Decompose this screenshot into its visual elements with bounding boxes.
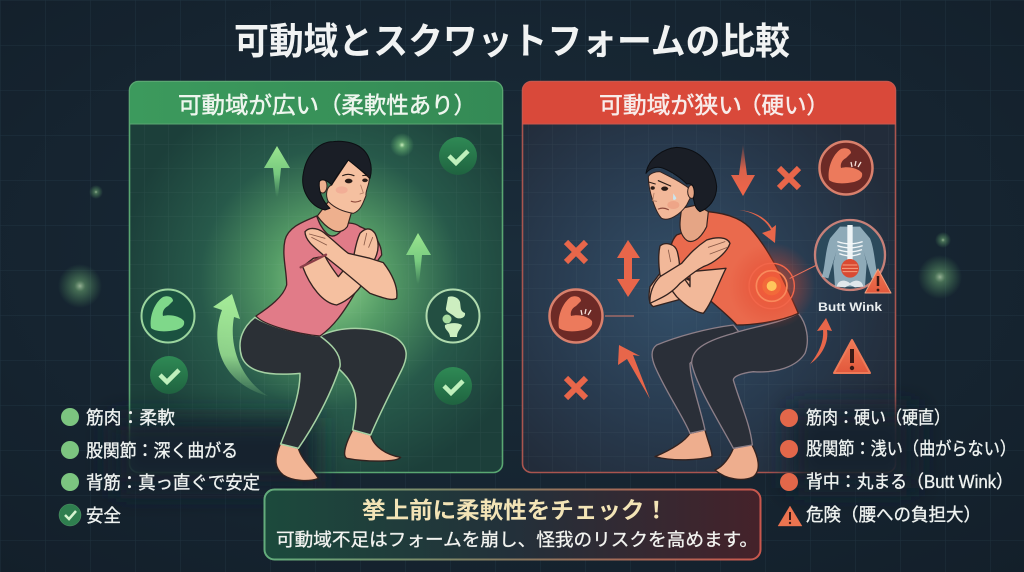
panel: wide range of motion: （柔軟性あり） bbox=[319, 92, 476, 118]
figure: flexible squat bbox=[240, 141, 406, 481]
figure: stiff squat bbox=[646, 147, 817, 479]
upper body bbox=[256, 141, 397, 336]
panel: narrow range of motion: （硬い） bbox=[739, 92, 829, 118]
icon: large warning bbox=[834, 340, 870, 373]
ear bbox=[318, 179, 327, 193]
arm with left-side hand bbox=[305, 228, 397, 299]
callout bbox=[264, 490, 760, 560]
panel: wide range of motion: 可動域が広い bbox=[178, 92, 319, 118]
legend: stiff bbox=[778, 408, 1016, 526]
sleeve hem bbox=[301, 255, 326, 267]
legend item: muscle: 筋肉：柔軟 bbox=[86, 408, 175, 428]
face bbox=[648, 172, 693, 219]
hair bbox=[646, 147, 717, 212]
legend item: hip: 股関節：深く曲がる bbox=[86, 441, 238, 461]
panel: narrow range of motion: 可動域が狭い bbox=[599, 92, 742, 118]
icon: stiff muscle lower bbox=[550, 290, 602, 342]
hair bbox=[303, 141, 371, 210]
icon: stiff muscle upper bbox=[820, 142, 872, 194]
legend: flexible bbox=[59, 408, 260, 526]
ear bbox=[688, 185, 696, 198]
leggings bbox=[240, 317, 406, 448]
cross marks bbox=[566, 168, 799, 398]
arrows: red bbox=[617, 144, 832, 399]
leggings bbox=[652, 313, 807, 448]
finger lines bbox=[309, 233, 373, 247]
icon: flexible muscle bbox=[142, 290, 194, 342]
neck bbox=[317, 202, 352, 232]
upper body bbox=[646, 147, 798, 325]
title: 可動域とスクワットフォームの比較 bbox=[234, 21, 790, 62]
callout: 可動域不足はフォームを崩し、怪我のリスクを高めます。 bbox=[276, 530, 758, 550]
check badges bbox=[150, 137, 477, 405]
legend item: back: 背筋：真っ直ぐで安定 bbox=[86, 473, 260, 493]
arm with large hand bbox=[650, 238, 730, 303]
feet bbox=[276, 430, 401, 481]
legend item: danger: 危険（腰への負担大） bbox=[806, 505, 981, 525]
arm with right-side hand bbox=[303, 229, 378, 305]
face details bbox=[343, 174, 369, 202]
icon: knee joint bbox=[426, 290, 480, 342]
up arrows: green bbox=[264, 146, 431, 284]
connector line bbox=[605, 315, 634, 317]
legend item: safe: 安全 bbox=[86, 506, 121, 526]
finger lines bbox=[668, 242, 727, 262]
list backdrop fades bbox=[112, 408, 915, 490]
panel: narrow range of motion bbox=[522, 82, 896, 472]
panel: wide range of motion bbox=[130, 82, 502, 472]
feet bbox=[655, 430, 758, 479]
floating glow dots bbox=[58, 185, 962, 308]
shirt bbox=[256, 216, 382, 336]
neck bbox=[680, 205, 708, 241]
legend item: muscle: 筋肉：硬い（硬直） bbox=[806, 408, 950, 428]
label: Butt Wink: Butt Wink bbox=[818, 300, 882, 314]
arm with small hand bbox=[659, 244, 726, 313]
callout: 挙上前に柔軟性をチェック！ bbox=[362, 497, 668, 523]
shirt bbox=[670, 212, 798, 325]
glow dot in panel bbox=[390, 133, 414, 157]
legend item: back: 背中：丸まる（Butt Wink） bbox=[806, 472, 1013, 492]
icon: lumbar x-ray bbox=[815, 220, 885, 290]
legend item: safe bbox=[59, 504, 121, 526]
pain marker bbox=[728, 243, 817, 329]
curved arrow: hip hinge bbox=[213, 294, 268, 396]
icon: small warning bbox=[865, 269, 891, 293]
face bbox=[327, 160, 369, 213]
face details bbox=[649, 181, 671, 210]
rear forearm and elbow bbox=[649, 273, 697, 307]
